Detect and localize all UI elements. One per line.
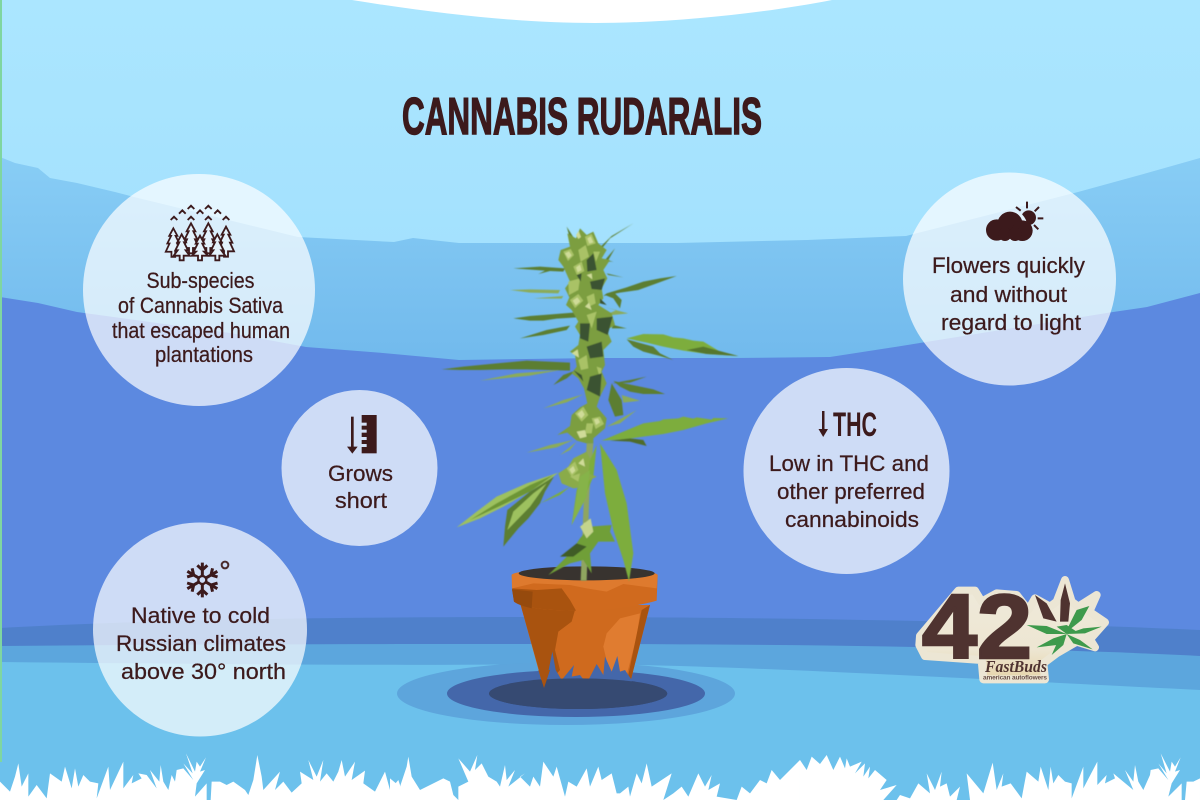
text: low thc: other preferred bbox=[777, 479, 925, 504]
icon: down arrow thc: THC bbox=[833, 406, 877, 444]
light blue hills bbox=[0, 157, 1200, 400]
logo tagline: american autoflowers bbox=[983, 674, 1047, 682]
grass right bbox=[800, 753, 1200, 800]
text: grows short: Grows bbox=[328, 461, 393, 486]
panel: low thc bbox=[744, 368, 950, 574]
bud dark shards bbox=[573, 253, 613, 397]
text: sub-species: plantations bbox=[155, 342, 253, 367]
text: flowers quickly: regard to light bbox=[941, 310, 1081, 335]
ground near bbox=[0, 662, 1200, 800]
text: cold climates: Russian climates bbox=[116, 631, 286, 656]
grass left bbox=[0, 753, 400, 800]
lower left leaf pair bbox=[457, 473, 558, 527]
logo leaf bbox=[1027, 583, 1102, 655]
white arc at top bbox=[352, 0, 832, 23]
ground far bbox=[0, 644, 1200, 800]
stem bbox=[581, 443, 593, 581]
panel: flowers quickly bbox=[903, 172, 1116, 386]
icon: snowflake bbox=[185, 562, 228, 597]
text: sub-species bbox=[112, 268, 290, 367]
icon: ruler with down arrow bbox=[347, 415, 377, 454]
text: low thc: cannabinoids bbox=[785, 507, 919, 532]
text: sub-species: Sub-species bbox=[146, 268, 254, 293]
icon: down arrow thc bbox=[818, 406, 877, 444]
dark leaves bbox=[442, 223, 677, 417]
title: CANNABIS RUDARALIS bbox=[402, 88, 762, 146]
large bright leaves bbox=[540, 334, 738, 582]
dark horizon band bbox=[0, 617, 1200, 700]
text: grows short bbox=[328, 461, 393, 513]
pale thin leaves bbox=[480, 289, 640, 455]
logo wordmark: FastBuds bbox=[984, 657, 1047, 676]
panel: grows short bbox=[282, 390, 438, 546]
grass centre bbox=[390, 755, 800, 800]
text: sub-species: of Cannabis Sativa bbox=[118, 293, 284, 318]
cannabis plant bbox=[442, 223, 738, 582]
text: flowers quickly: and without bbox=[950, 282, 1067, 307]
text: cold climates: above 30° north bbox=[121, 659, 286, 684]
plant pot bbox=[489, 566, 667, 709]
text: sub-species: that escaped human bbox=[112, 318, 290, 343]
text: flowers quickly: Flowers quickly bbox=[932, 253, 1085, 278]
icon: forest bbox=[166, 206, 234, 260]
blue hills bbox=[0, 293, 1200, 700]
text: flowers quickly bbox=[932, 253, 1085, 335]
text: grows short: short bbox=[335, 488, 387, 513]
icon: cloud and sun bbox=[986, 202, 1043, 241]
cola body bbox=[557, 228, 615, 443]
text: low thc bbox=[769, 451, 929, 532]
lower bud bbox=[558, 452, 597, 488]
panel: sub-species bbox=[83, 174, 315, 406]
logo: 42 fastbuds bbox=[919, 577, 1105, 682]
logo number: 42 bbox=[922, 577, 1032, 678]
pot shadow bbox=[397, 662, 735, 725]
text: low thc: Low in THC and bbox=[769, 451, 929, 476]
panel: cold climates bbox=[93, 522, 307, 736]
text: cold climates bbox=[116, 603, 286, 684]
bud pale patches bbox=[565, 231, 600, 532]
text: cold climates: Native to cold bbox=[131, 603, 270, 628]
bottom bud branch bbox=[548, 525, 615, 575]
bud light patches bbox=[563, 234, 604, 482]
left edge line bbox=[0, 0, 2, 762]
